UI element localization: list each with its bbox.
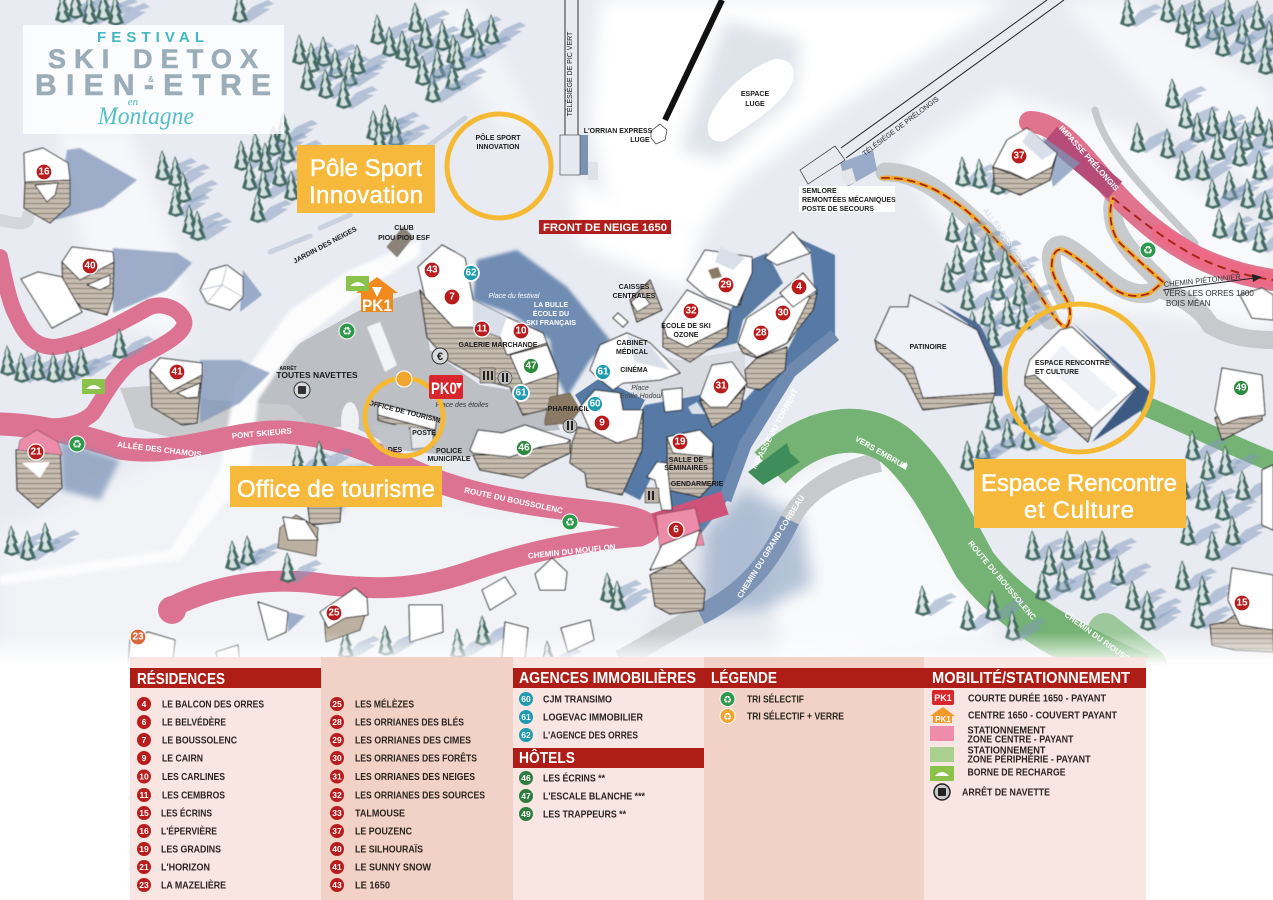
map labels: SKI FRANÇAIS <box>526 320 576 327</box>
map markers: 21 <box>30 446 42 458</box>
panel: résidences: 10 <box>139 772 149 782</box>
heading: agences immobilières: AGENCES IMMOBILIÈRES <box>519 668 696 687</box>
map labels: ESPACE <box>741 91 769 98</box>
panel: résidences: 32 <box>332 790 342 800</box>
map background <box>0 0 1273 660</box>
road names: CHEMIN DU MOUFLON <box>528 542 616 561</box>
panel: agences immobilières: L'AGENCE DES ORRES <box>543 730 638 742</box>
chemin pietonnier with arrow: BOIS MÉAN <box>1166 299 1211 308</box>
map markers: 16 <box>38 166 50 178</box>
panel: mobilité / stationnement: STATIONNEMENT <box>968 726 1046 736</box>
map labels: LUGE <box>630 137 650 144</box>
panel: résidences: 15 <box>139 808 149 818</box>
residences 4, 30, 28 <box>738 273 817 390</box>
map markers: 9 <box>599 418 605 428</box>
panel: résidences: LES ÉCRINS <box>161 806 212 820</box>
panel: hôtels <box>513 748 704 821</box>
road names: VERS EMBRUN <box>853 434 909 472</box>
building 21 <box>16 430 120 508</box>
map markers: 10 <box>515 326 527 336</box>
panel: résidences: LE CAIRN <box>162 754 203 764</box>
chalet east edge <box>1240 288 1273 530</box>
office de tourisme building <box>372 403 437 450</box>
map markers: 37 <box>1013 150 1025 162</box>
map icons <box>69 242 1156 530</box>
panel: hôtels: LES ÉCRINS ** <box>543 772 605 784</box>
map markers: 60 <box>589 398 601 410</box>
map labels: Place <box>631 385 649 392</box>
icon: parking PK1: PK1 <box>362 296 392 315</box>
panel: résidences <box>130 668 485 892</box>
map labels: PIOU PIOU ESF <box>378 235 431 242</box>
dashed pedestrian paths <box>882 178 1273 327</box>
map markers: 28 <box>755 328 767 338</box>
panel: résidences: LES GRADINS <box>161 844 221 856</box>
icon: elevators gendarmerie <box>645 488 659 503</box>
map labels: MÉDICAL <box>616 347 649 356</box>
panel: mobilité / stationnement: COURTE DURÉE 1650 - PAYANT <box>968 692 1106 704</box>
title block <box>23 25 284 134</box>
map markers: 61 <box>597 366 609 378</box>
panel: agences immobilières: 60 <box>521 694 531 704</box>
heading: mobilité: MOBILITÉ/STATIONNEMENT <box>932 668 1130 687</box>
heading: légende <box>704 668 924 688</box>
panel: légende: TRI SÉLECTIF <box>747 692 804 706</box>
map labels: MUNICIPALE <box>427 456 471 463</box>
icon: parking PK0: PK0 <box>431 379 457 398</box>
building 16 <box>24 148 137 223</box>
panel: résidences: 16 <box>139 826 149 836</box>
lift: Télésiège de Prélongis <box>841 0 1064 158</box>
pharmacy block <box>545 393 580 425</box>
map labels: JARDIN DES NEIGES <box>292 226 358 265</box>
panel: hôtels: 46 <box>521 773 531 783</box>
building 41 <box>150 358 270 425</box>
label: Pôle Sport Innovation: Pôle Sport <box>310 155 422 182</box>
panel: mobilité / stationnement: ZONE CENTRE - PAYANT <box>968 734 1074 746</box>
lift: Télésiège de Pic Vert <box>565 0 578 135</box>
icon: recycling points: ♻ <box>342 325 352 338</box>
espace luge zone <box>708 59 794 141</box>
label: semlore: SEMLORE <box>802 188 837 195</box>
panel: mobilité / stationnement: STATIONNEMENT <box>968 746 1046 756</box>
panel: agences immobilières: 62 <box>521 730 531 740</box>
panel: résidences: LES CEMBROS <box>162 790 225 802</box>
panel: résidences: 41 <box>332 862 342 872</box>
panel: légende: ♻ <box>723 712 732 723</box>
panel: résidences: 33 <box>332 808 342 818</box>
map markers: 6 <box>673 524 679 536</box>
map labels: Émile Hodoul <box>620 391 662 400</box>
icon: bus stop <box>294 382 310 398</box>
map labels: TÉLÉSIÈGE DE PRÉLONGIS <box>861 94 941 158</box>
panel: résidences: LE SUNNY SNOW <box>355 862 431 874</box>
town blue shadow: east channel <box>683 253 783 353</box>
panel: résidences: 29 <box>332 735 342 745</box>
title: ski detox: SKI DETOX <box>48 44 258 74</box>
map labels: PHARMACIE <box>548 406 591 413</box>
map labels: ET CULTURE <box>1035 369 1079 376</box>
chalets south west <box>278 465 370 556</box>
map markers: 11 <box>477 324 488 334</box>
residence 32 <box>663 290 730 362</box>
cinema and medical block <box>590 333 680 390</box>
jardin des neiges strips <box>270 118 465 252</box>
roads: pink and green parking zones <box>0 122 1273 675</box>
road names: ALLÉE DES MÉLÈZES <box>981 206 1037 281</box>
icon: euro <box>432 348 448 364</box>
white ski piste <box>0 240 420 585</box>
panel: résidences: 19 <box>139 844 149 854</box>
residence 37 <box>993 128 1080 195</box>
semlore station <box>800 146 877 187</box>
plaza white spots <box>367 322 397 372</box>
building 46 <box>470 425 570 478</box>
map markers: 7 <box>449 292 455 302</box>
map labels: CABINET <box>616 340 648 347</box>
map markers: 41 <box>171 366 183 378</box>
map markers: 47 <box>525 360 537 372</box>
caisses centrales <box>613 280 662 327</box>
map labels: TOUTES NAVETTES <box>276 370 358 380</box>
map labels: Place du festival <box>489 293 540 300</box>
panel: résidences: LES ORRIANES DES CIMES <box>355 736 471 746</box>
residence 31 <box>662 362 747 427</box>
panel: résidences: LE POUZENC <box>355 826 412 838</box>
map labels: GALERIE MARCHANDE <box>459 342 538 349</box>
title: bien-etre: BIEN-ETRE <box>35 69 271 102</box>
slope blue shadow <box>700 490 812 612</box>
map markers: 61 <box>515 388 527 398</box>
heading: hôtels <box>513 748 704 768</box>
panel: légende: ♻ <box>723 695 732 706</box>
panel: résidences: 40 <box>332 844 342 854</box>
map markers: 62 <box>465 268 477 278</box>
residence 29 <box>687 247 752 307</box>
residence 49 <box>1215 368 1265 440</box>
buildings <box>16 128 1273 668</box>
road names: CHEMIN DU RIOUSSEC <box>1063 610 1140 670</box>
panel: résidences: LE 1650 <box>355 880 390 892</box>
panel: hôtels: 47 <box>521 791 531 801</box>
orrian express hut <box>651 124 667 144</box>
lifts <box>560 0 1064 187</box>
panel: agences immobilières: LOGEVAC IMMOBILIER <box>543 712 644 724</box>
panel: agences immobilières: 61 <box>521 712 531 722</box>
label: Espace Rencontre et Culture: Espace Rencontre <box>981 470 1177 497</box>
title: en: en <box>128 96 139 108</box>
label: Espace Rencontre et Culture <box>974 459 1186 528</box>
map markers: 15 <box>1236 598 1248 608</box>
road names: IMPASSE DU TORRENT <box>750 387 800 471</box>
map labels: SÉMINAIRES <box>664 463 708 472</box>
road names <box>117 124 1140 670</box>
map markers: 46 <box>518 442 530 454</box>
icon: toilets <box>498 371 512 385</box>
road names: ROUTE DU BOUSSOLENC <box>463 486 564 515</box>
panel: mobilité / stationnement: ZONE PÉRIPHÉRIE - PAYANT <box>968 752 1090 766</box>
gray plaza <box>253 290 560 458</box>
icon: glass recycling <box>396 371 412 387</box>
building 40 <box>21 247 192 328</box>
station: Pic Vert <box>560 135 598 180</box>
panel: résidences: LE SILHOURAÏS <box>355 842 423 856</box>
icon: toilets pharmacy <box>563 419 577 433</box>
panel backgrounds <box>130 657 1146 900</box>
chalet round <box>200 265 262 312</box>
gray roads <box>0 110 1273 660</box>
panel: mobilité / stationnement: CENTRE 1650 - COUVERT PAYANT <box>968 710 1117 722</box>
map markers: 49 <box>1235 382 1247 394</box>
town blue shadow: torrent <box>620 233 835 535</box>
road names: IMPASSE PRÉLONGIS <box>1057 124 1121 193</box>
espace rencontre et culture <box>1025 322 1150 442</box>
residence 19 and gendarmerie <box>647 430 713 510</box>
title: montagne: Montagne <box>97 103 194 130</box>
map markers: 23 <box>132 632 144 642</box>
panel: résidences: L'HORIZON <box>161 862 210 874</box>
map labels: CENTRALES <box>613 293 656 300</box>
heading: hôtels: HÔTELS <box>519 748 575 767</box>
icon: charging stations <box>82 276 369 394</box>
map labels: POLICE <box>436 448 462 455</box>
central curved residence 7 and 43 <box>418 245 558 415</box>
panel: résidences: 9 <box>142 753 147 763</box>
map labels: TÉLÉSIÈGE DE PIC VERT <box>565 31 574 116</box>
panel: résidences: LES CARLINES <box>162 772 225 783</box>
map labels <box>117 31 1262 670</box>
residence 4 upper chalet <box>765 232 810 265</box>
map labels: PATINOIRE <box>909 344 947 351</box>
bottom fade of the map <box>0 632 1273 666</box>
label: Espace Rencontre et Culture: et Culture <box>1024 497 1134 524</box>
panel: résidences: 7 <box>142 735 147 745</box>
road names: PONT SKIEURS <box>231 426 293 441</box>
map labels: CINÉMA <box>620 365 648 374</box>
map labels: ARRÊT <box>279 364 297 372</box>
lift: Orrian Express Luge <box>665 0 722 120</box>
panel: résidences: LE BALCON DES ORRES <box>162 700 264 710</box>
club piou piou hut <box>387 227 413 257</box>
panel: résidences: L'ÉPERVIÈRE <box>161 824 217 838</box>
label: Office de tourisme: Office de tourisme <box>237 476 435 503</box>
map labels: POSTE <box>412 430 436 437</box>
panel: résidences: LES ORRIANES DES NEIGES <box>355 772 475 783</box>
title: festival: FESTIVAL <box>97 29 204 46</box>
panel: résidences: 4 <box>142 699 147 709</box>
patinoire <box>875 295 1003 410</box>
chalet row along mouflon <box>128 558 594 668</box>
label: semlore: REMONTÉES MÉCANIQUES <box>802 195 896 204</box>
panel: résidences: LE BOUSSOLENC <box>162 736 237 746</box>
building 47 <box>510 345 558 385</box>
chemin pietonnier with arrow <box>1163 272 1262 308</box>
icon: recycling points: ♻ <box>565 516 575 529</box>
panel: résidences: 21 <box>139 862 149 872</box>
map labels: Place des étoiles <box>436 402 489 409</box>
yellow highlight circles <box>365 114 1153 456</box>
map labels: CAISSES <box>619 284 650 291</box>
panel: hôtels: L'ESCALE BLANCHE *** <box>543 792 645 802</box>
town blue shadow: place du festival <box>473 250 610 397</box>
tower 6 <box>650 508 705 614</box>
panel: mobilité / stationnement <box>924 668 1146 800</box>
map labels: GENDARMERIE <box>671 481 724 488</box>
panel: agences immobilières: CJM TRANSIMO <box>543 694 612 706</box>
heading: légende: LÉGENDE <box>711 668 777 687</box>
map markers: 30 <box>777 308 789 318</box>
map labels: INNOVATION <box>477 144 519 151</box>
map labels: ÉCOLE DE SKI <box>661 321 711 330</box>
panel: mobilité / stationnement: PK1 <box>934 693 952 703</box>
map markers: 19 <box>674 436 686 448</box>
icon: recycling points: ♻ <box>72 438 82 451</box>
panel: résidences: 37 <box>332 826 342 836</box>
map markers: 40 <box>84 260 96 272</box>
panel: légende: TRI SÉLECTIF + VERRE <box>747 710 844 722</box>
road names: CHEMIN DU GRAND CORBEAU <box>735 493 806 600</box>
icon: recycling points <box>69 242 1156 530</box>
map labels: DES <box>388 447 403 454</box>
title: ampersand: & <box>148 75 154 84</box>
map labels: L'ORRIAN EXPRESS <box>584 128 653 135</box>
map markers: 25 <box>328 608 340 618</box>
map markers <box>28 148 1250 645</box>
map labels: ÉCOLE DU <box>533 309 569 318</box>
panel: résidences: LE BELVÉDÈRE <box>162 716 226 728</box>
label: semlore: POSTE DE SECOURS <box>802 206 874 213</box>
panel: résidences: 23 <box>139 880 149 890</box>
panel: agences immobilières <box>513 668 704 742</box>
panel: légende <box>704 668 924 724</box>
map markers: 32 <box>685 306 697 316</box>
label: Pôle Sport Innovation <box>297 145 435 213</box>
chemin pietonnier with arrow: CHEMIN PIÉTONNIER <box>1163 272 1242 289</box>
panel: résidences: LA MAZELIÈRE <box>161 878 226 892</box>
map labels: SALLE DE <box>669 457 704 464</box>
label: Front de neige 1650: FRONT DE NEIGE 1650 <box>543 222 667 234</box>
road names: ALLÉE DES CHAMOIS <box>117 440 203 459</box>
heading: résidences <box>130 668 321 688</box>
residence 15 <box>1210 568 1273 652</box>
panel: mobilité / stationnement: PK1 <box>935 715 951 724</box>
map labels: OZONE <box>674 332 699 339</box>
map labels: CLUB <box>394 225 414 232</box>
map markers: 31 <box>715 380 727 392</box>
panel: hôtels: 49 <box>521 809 531 819</box>
map markers: 4 <box>796 282 802 292</box>
icon: elevators <box>480 368 495 383</box>
heading: résidences: RÉSIDENCES <box>137 669 225 688</box>
panel: résidences: 25 <box>332 699 342 709</box>
panel: résidences: 11 <box>140 790 149 800</box>
road names: ROUTE DU BOUSSOLENC <box>966 539 1038 622</box>
map labels: LUGE <box>745 101 765 108</box>
icon: euro: € <box>437 351 443 363</box>
label: semlore <box>799 186 896 213</box>
map labels: OFFICE DE TOURISME <box>368 400 443 425</box>
panel: résidences: 31 <box>332 772 342 782</box>
panel: résidences: 30 <box>332 753 342 763</box>
panel: mobilité / stationnement: ARRÊT DE NAVETTE <box>962 786 1050 798</box>
map labels: PÔLE SPORT <box>475 133 521 142</box>
label: Pôle Sport Innovation: Innovation <box>309 182 423 209</box>
tower 9 and 60 <box>570 390 643 495</box>
fir tree clusters <box>0 0 1273 671</box>
panel: résidences: 43 <box>332 880 342 890</box>
legend panel <box>130 657 1146 900</box>
label: Office de tourisme <box>230 466 442 507</box>
panel: hôtels: LES TRAPPEURS ** <box>543 810 626 820</box>
map labels: LA BULLE <box>534 302 568 309</box>
panel: mobilité / stationnement: BORNE DE RECHARGE <box>968 768 1066 778</box>
panel: résidences: LES ORRIANES DES SOURCES <box>355 790 485 802</box>
panel: résidences: LES MÉLÈZES <box>355 698 414 710</box>
panel: résidences: 6 <box>142 717 147 727</box>
icon: parking PK1 <box>356 277 398 315</box>
panel: résidences: TALMOUSE <box>355 808 405 820</box>
icon: recycling points: ♻ <box>1143 244 1153 257</box>
map labels: ESPACE RENCONTRE <box>1035 360 1110 367</box>
panel: résidences: LES ORRIANES DES FORÊTS <box>355 752 477 764</box>
panel: résidences: 28 <box>332 717 342 727</box>
chemin pietonnier with arrow: VERS LES ORRES 1800 <box>1164 289 1254 298</box>
map markers: 43 <box>426 264 438 276</box>
map markers: 29 <box>720 280 732 290</box>
panel: résidences: LES ORRIANES DES BLÉS <box>355 716 464 728</box>
